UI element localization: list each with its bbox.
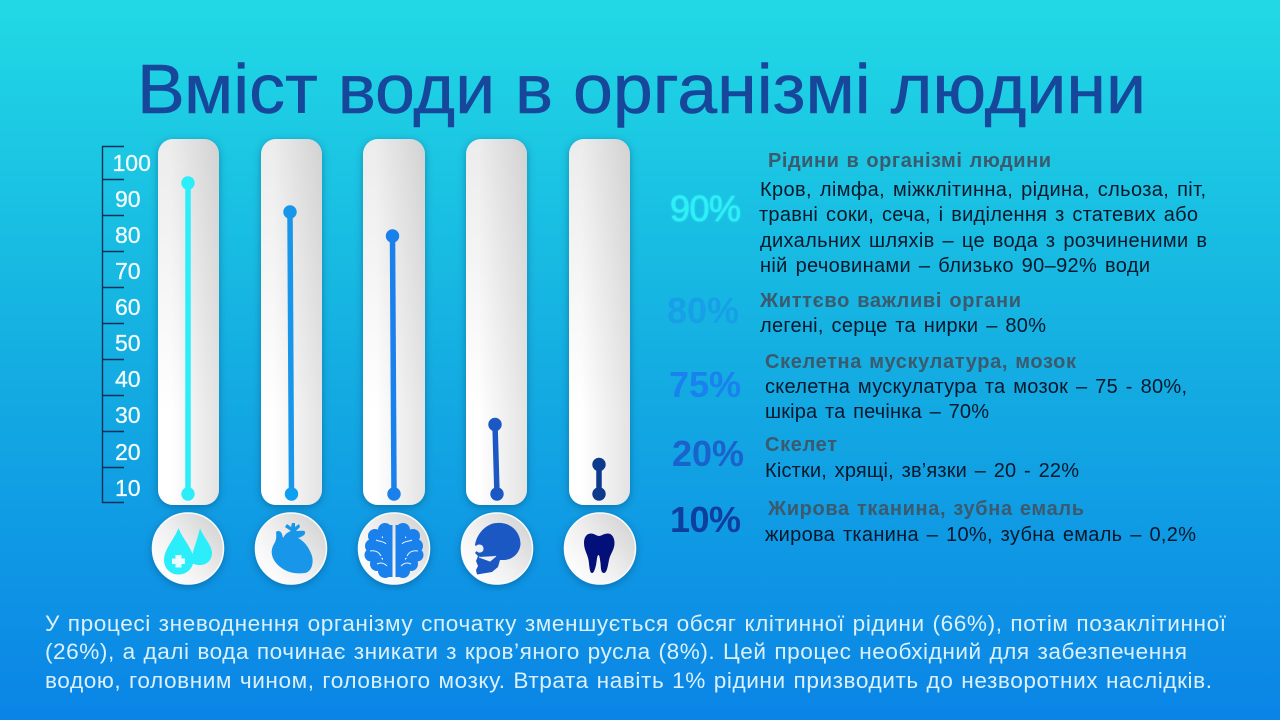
text: vital organs: легені, серце та нирки – 80% (760, 315, 1046, 337)
column: muscles and brain 75% (363, 139, 425, 505)
text: dehydration note: У процесі зневоднення організму спочатку зменшується обсяг клітинної рідини (66%), потім позаклітинної (45, 611, 1227, 636)
percent 10%: 10% (670, 499, 741, 540)
percent scale (102, 146, 151, 502)
text: body fluids: дихальних шляхів – це вода з розчиненими в (760, 230, 1207, 252)
percent 20%: 20% (672, 433, 744, 474)
icon: skull (462, 513, 532, 584)
block: skeleton (672, 433, 1079, 482)
percent scale: 50 (115, 330, 141, 356)
percent scale: 80 (115, 222, 141, 248)
icon: heart (256, 513, 326, 584)
text: muscles and brain: скелетна мускулатура та мозок – 75 - 80%, (765, 376, 1187, 398)
percent 90%: 90% (670, 188, 741, 229)
heading: muscles and brain: Скелетна мускулатура, мозок (765, 351, 1077, 373)
percent scale: 10 (115, 475, 141, 501)
heading: vital organs: Життєво важливі органи (759, 290, 1021, 312)
icon: brain (358, 513, 430, 584)
block: fat and enamel (670, 498, 1196, 546)
block: body fluids (670, 150, 1207, 277)
percent 80%: 80% (667, 290, 739, 331)
percent scale: 20 (115, 439, 141, 465)
text: dehydration note: (26%), а далі вода починає зникати з кров’яного русла (8%). Цей процес необхідний для забезпечення (45, 639, 1187, 664)
block: muscles and brain (669, 351, 1187, 423)
icon: water drops (152, 513, 224, 584)
text: body fluids: Кров, лімфа, міжклітинна, рідина, сльоза, піт, (760, 179, 1206, 201)
text: dehydration note: водою, головним чином, головного мозку. Втрата навіть 1% рідини призводить до незворотних наслідків. (45, 668, 1212, 693)
column: fat and enamel 10% (569, 139, 630, 505)
text: dehydration note (45, 611, 1227, 693)
text: fat and enamel: жирова тканина – 10%, зубна емаль – 0,2% (765, 524, 1196, 546)
percent scale: 60 (115, 294, 141, 320)
icon: tooth (564, 513, 636, 584)
heading: body fluids: Рідини в організмі людини (768, 150, 1051, 172)
title: Вміст води в організмі людини (137, 50, 1146, 128)
column: vital organs 80% (261, 139, 322, 505)
percent 75%: 75% (669, 364, 741, 405)
heading: fat and enamel: Жирова тканина, зубна емаль (767, 498, 1084, 520)
percent scale: 40 (115, 366, 141, 392)
text: body fluids: травні соки, сеча, і виділення з статевих або (759, 204, 1198, 226)
percent scale: 90 (115, 186, 141, 212)
block: vital organs (667, 290, 1046, 337)
text: body fluids (759, 179, 1207, 277)
heading: skeleton: Скелет (765, 434, 837, 456)
text: muscles and brain (765, 376, 1187, 423)
column: skeleton 20% (466, 139, 527, 505)
text: muscles and brain: шкіра та печінка – 70% (765, 401, 989, 423)
percent scale: 100 (112, 150, 151, 176)
percent scale: 70 (115, 258, 141, 284)
text: body fluids: ній речовинами – близько 90–92% води (760, 255, 1150, 277)
percent scale: 30 (115, 402, 141, 428)
text: skeleton: Кістки, хрящі, зв’язки – 20 - 22% (765, 460, 1079, 482)
column: body fluids 90% (158, 139, 219, 505)
